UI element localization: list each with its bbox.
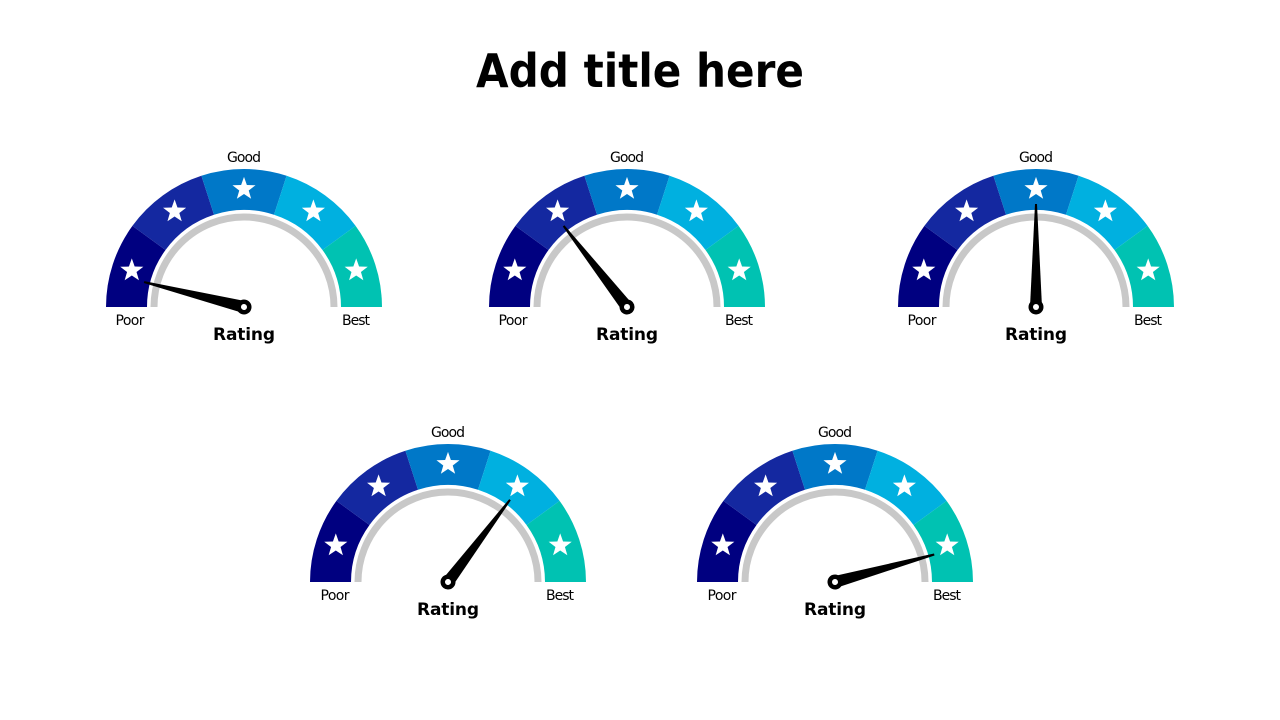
labels 4: Good bbox=[431, 425, 465, 441]
gauge 1 bbox=[106, 150, 382, 345]
title: Add title here bbox=[476, 44, 804, 98]
needle 2 bbox=[558, 221, 638, 318]
labels 4: Best bbox=[546, 588, 574, 604]
labels 4: Rating bbox=[417, 600, 479, 620]
labels 3: Good bbox=[1019, 150, 1053, 166]
labels 2: Best bbox=[725, 313, 754, 329]
labels 3: Best bbox=[1134, 313, 1162, 329]
labels 3: Poor bbox=[908, 313, 937, 329]
needle 4 bbox=[437, 495, 516, 593]
gauge 3 bbox=[898, 150, 1174, 345]
gauge 4 bbox=[310, 425, 586, 620]
labels 5: Good bbox=[818, 425, 852, 441]
labels 1: Poor bbox=[116, 313, 145, 329]
labels 1: Rating bbox=[213, 325, 275, 345]
needle 5 bbox=[826, 547, 936, 591]
labels 1: Best bbox=[342, 313, 370, 329]
labels 3 bbox=[908, 150, 1162, 345]
labels 2: Poor bbox=[498, 313, 528, 329]
gauge 5 bbox=[697, 425, 973, 620]
labels 2: Good bbox=[610, 150, 644, 166]
labels 3: Rating bbox=[1005, 325, 1067, 345]
labels 1: Good bbox=[227, 150, 261, 166]
labels 2: Rating bbox=[596, 325, 658, 345]
labels 1 bbox=[116, 150, 370, 345]
labels 5: Rating bbox=[804, 600, 866, 620]
labels 5: Poor bbox=[708, 588, 737, 604]
needle 3 bbox=[1028, 204, 1044, 314]
labels 4: Poor bbox=[320, 588, 350, 604]
labels 2 bbox=[498, 150, 754, 345]
labels 5 bbox=[708, 425, 962, 620]
labels 5: Best bbox=[933, 588, 962, 604]
labels 4 bbox=[320, 425, 574, 620]
needle 1 bbox=[142, 275, 253, 316]
gauge 2 bbox=[489, 150, 765, 345]
